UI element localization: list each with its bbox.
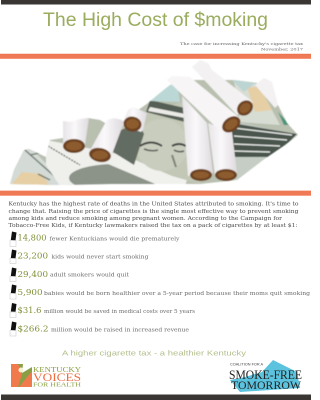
stat: healthier babies bbox=[10, 284, 310, 299]
stat: kids never start bbox=[10, 250, 149, 264]
cigarette: small 1 bbox=[63, 118, 89, 153]
stat: revenue bbox=[10, 322, 190, 336]
stat: revenue: $266.2 bbox=[18, 324, 48, 334]
intro paragraph bbox=[8, 202, 299, 229]
stat: medical savings bbox=[10, 303, 195, 318]
intro paragraph: change that. Raising the price of cigarettes is the single most effective way to prevent smoking bbox=[8, 209, 299, 215]
logo: Kentucky Voices for Health bbox=[11, 364, 82, 388]
logo: Kentucky Voices for Health: VOICES bbox=[33, 372, 81, 384]
icon: cigarette pack bbox=[10, 322, 16, 336]
cigarette: small 2 bbox=[88, 118, 123, 164]
icon: cigarette pack bbox=[10, 303, 16, 318]
subtitle: November, 2017 bbox=[261, 46, 304, 52]
lower orange divider bbox=[0, 191, 311, 196]
logo: Kentucky Voices for Health: KENTUCKY bbox=[33, 365, 82, 374]
stat: kids never start: 23,200 bbox=[18, 252, 48, 262]
cigarette: vertical right bbox=[208, 123, 237, 181]
icon: cigarette pack bbox=[10, 268, 16, 282]
top orange divider bbox=[0, 54, 311, 59]
money background bbox=[10, 80, 298, 186]
stat: healthier babies: 5,900 bbox=[18, 288, 42, 298]
bottom bar bbox=[1, 394, 311, 400]
subtitle bbox=[180, 41, 304, 52]
icon: cigarette pack bbox=[10, 284, 16, 299]
cigarette: far right fragment bbox=[255, 78, 278, 108]
cigarette: long diagonal front bbox=[167, 76, 243, 136]
logo: Coalition for a Smoke-Free Tomorrow: SMOKE-FREE bbox=[229, 367, 302, 382]
tagline: A higher cigarette tax - a healthier Kentucky bbox=[62, 348, 246, 358]
icon: cigarette pack bbox=[10, 232, 16, 246]
stat: medical savings: million would be saved in medical costs over 5 years bbox=[44, 309, 195, 315]
stat: medical savings: $31.6 bbox=[18, 306, 42, 316]
logo: Coalition for a Smoke-Free Tomorrow: TOMORROW bbox=[231, 380, 301, 392]
stat: revenue: million would be raised in increased revenue bbox=[51, 327, 190, 333]
stat: adults quit: 29,400 bbox=[18, 270, 48, 280]
subtitle: The case for increasing Kentucky's cigarette tax bbox=[180, 41, 304, 46]
intro paragraph: among kids and reduce smoking among pregnant women. According to the Campaign for bbox=[8, 216, 282, 222]
logo: Coalition for a Smoke-Free Tomorrow: COALITION FOR A bbox=[230, 362, 264, 366]
intro paragraph: Kentucky has the highest rate of deaths in the United States attributed to smoking. It's time to bbox=[8, 202, 299, 208]
title: The High Cost of $moking bbox=[43, 9, 268, 31]
intro paragraph: Tobacco-Free Kids, if Kentucky lawmakers raised the tax on a pack of cigarettes by at least $1: bbox=[8, 223, 298, 229]
top bar bbox=[1, 0, 311, 4]
blue shape bbox=[230, 360, 300, 392]
cigarette: vertical left bbox=[182, 96, 213, 181]
icon: cigarette pack bbox=[10, 250, 16, 264]
hero image: Kentucky silhouette of cigarettes and money bbox=[10, 60, 298, 186]
stat: premature deaths: fewer Kentuckians would die prematurely bbox=[50, 236, 180, 242]
stat: adults quit bbox=[10, 268, 130, 282]
logo: Kentucky Voices for Health: FOR HEALTH bbox=[33, 382, 82, 388]
cigarette: long diagonal back bbox=[192, 60, 256, 119]
stat: adults quit: adult smokers would quit bbox=[50, 273, 130, 279]
stat: kids never start: kids would never start smoking bbox=[52, 254, 149, 260]
cigarette: small 3 bbox=[122, 107, 147, 133]
stat: healthier babies: babies would be born healthier over a 5-year period because their moms quit smoking bbox=[44, 291, 310, 297]
logo: Coalition for a Smoke-Free Tomorrow bbox=[229, 360, 302, 392]
stat: premature deaths: 14,800 bbox=[18, 234, 46, 244]
logo mark bbox=[11, 364, 32, 387]
stat: premature deaths bbox=[10, 232, 180, 246]
